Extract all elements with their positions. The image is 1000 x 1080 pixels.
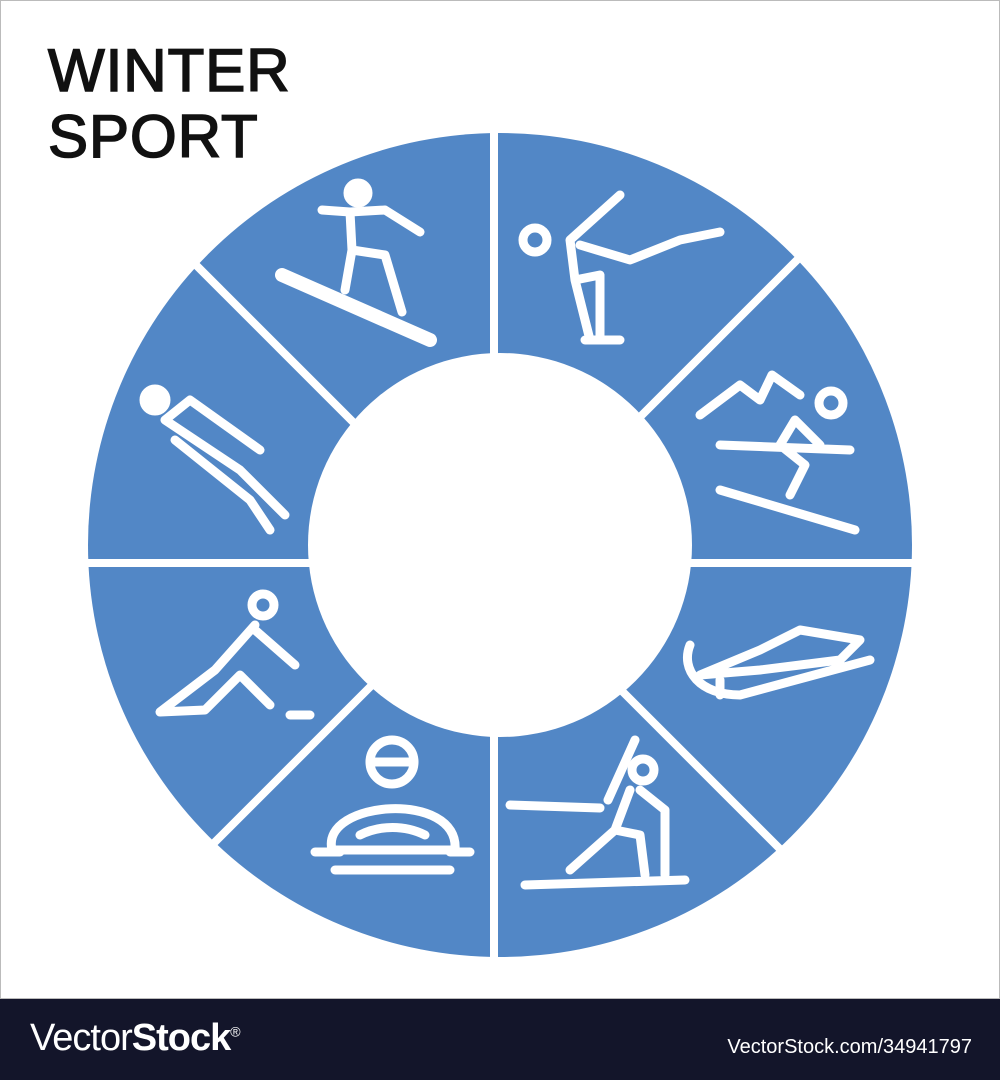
footer bar <box>0 999 1000 1080</box>
title: WINTER <box>48 37 291 104</box>
icon: curling <box>160 594 310 715</box>
icon: biathlon <box>510 740 685 885</box>
icon: two-man bob <box>315 740 470 870</box>
title <box>47 37 291 170</box>
icon: figure skating <box>523 195 720 340</box>
icon: snowboard <box>282 183 430 340</box>
ring chart <box>88 133 912 957</box>
icon: bobsleigh <box>687 630 870 695</box>
footer logo: VectorStock® <box>30 1017 240 1059</box>
icon: luge <box>144 389 285 530</box>
title: SPORT <box>48 103 259 170</box>
footer url: VectorStock.com/34941797 <box>727 1036 972 1058</box>
icon: alpine skiing <box>700 375 855 530</box>
